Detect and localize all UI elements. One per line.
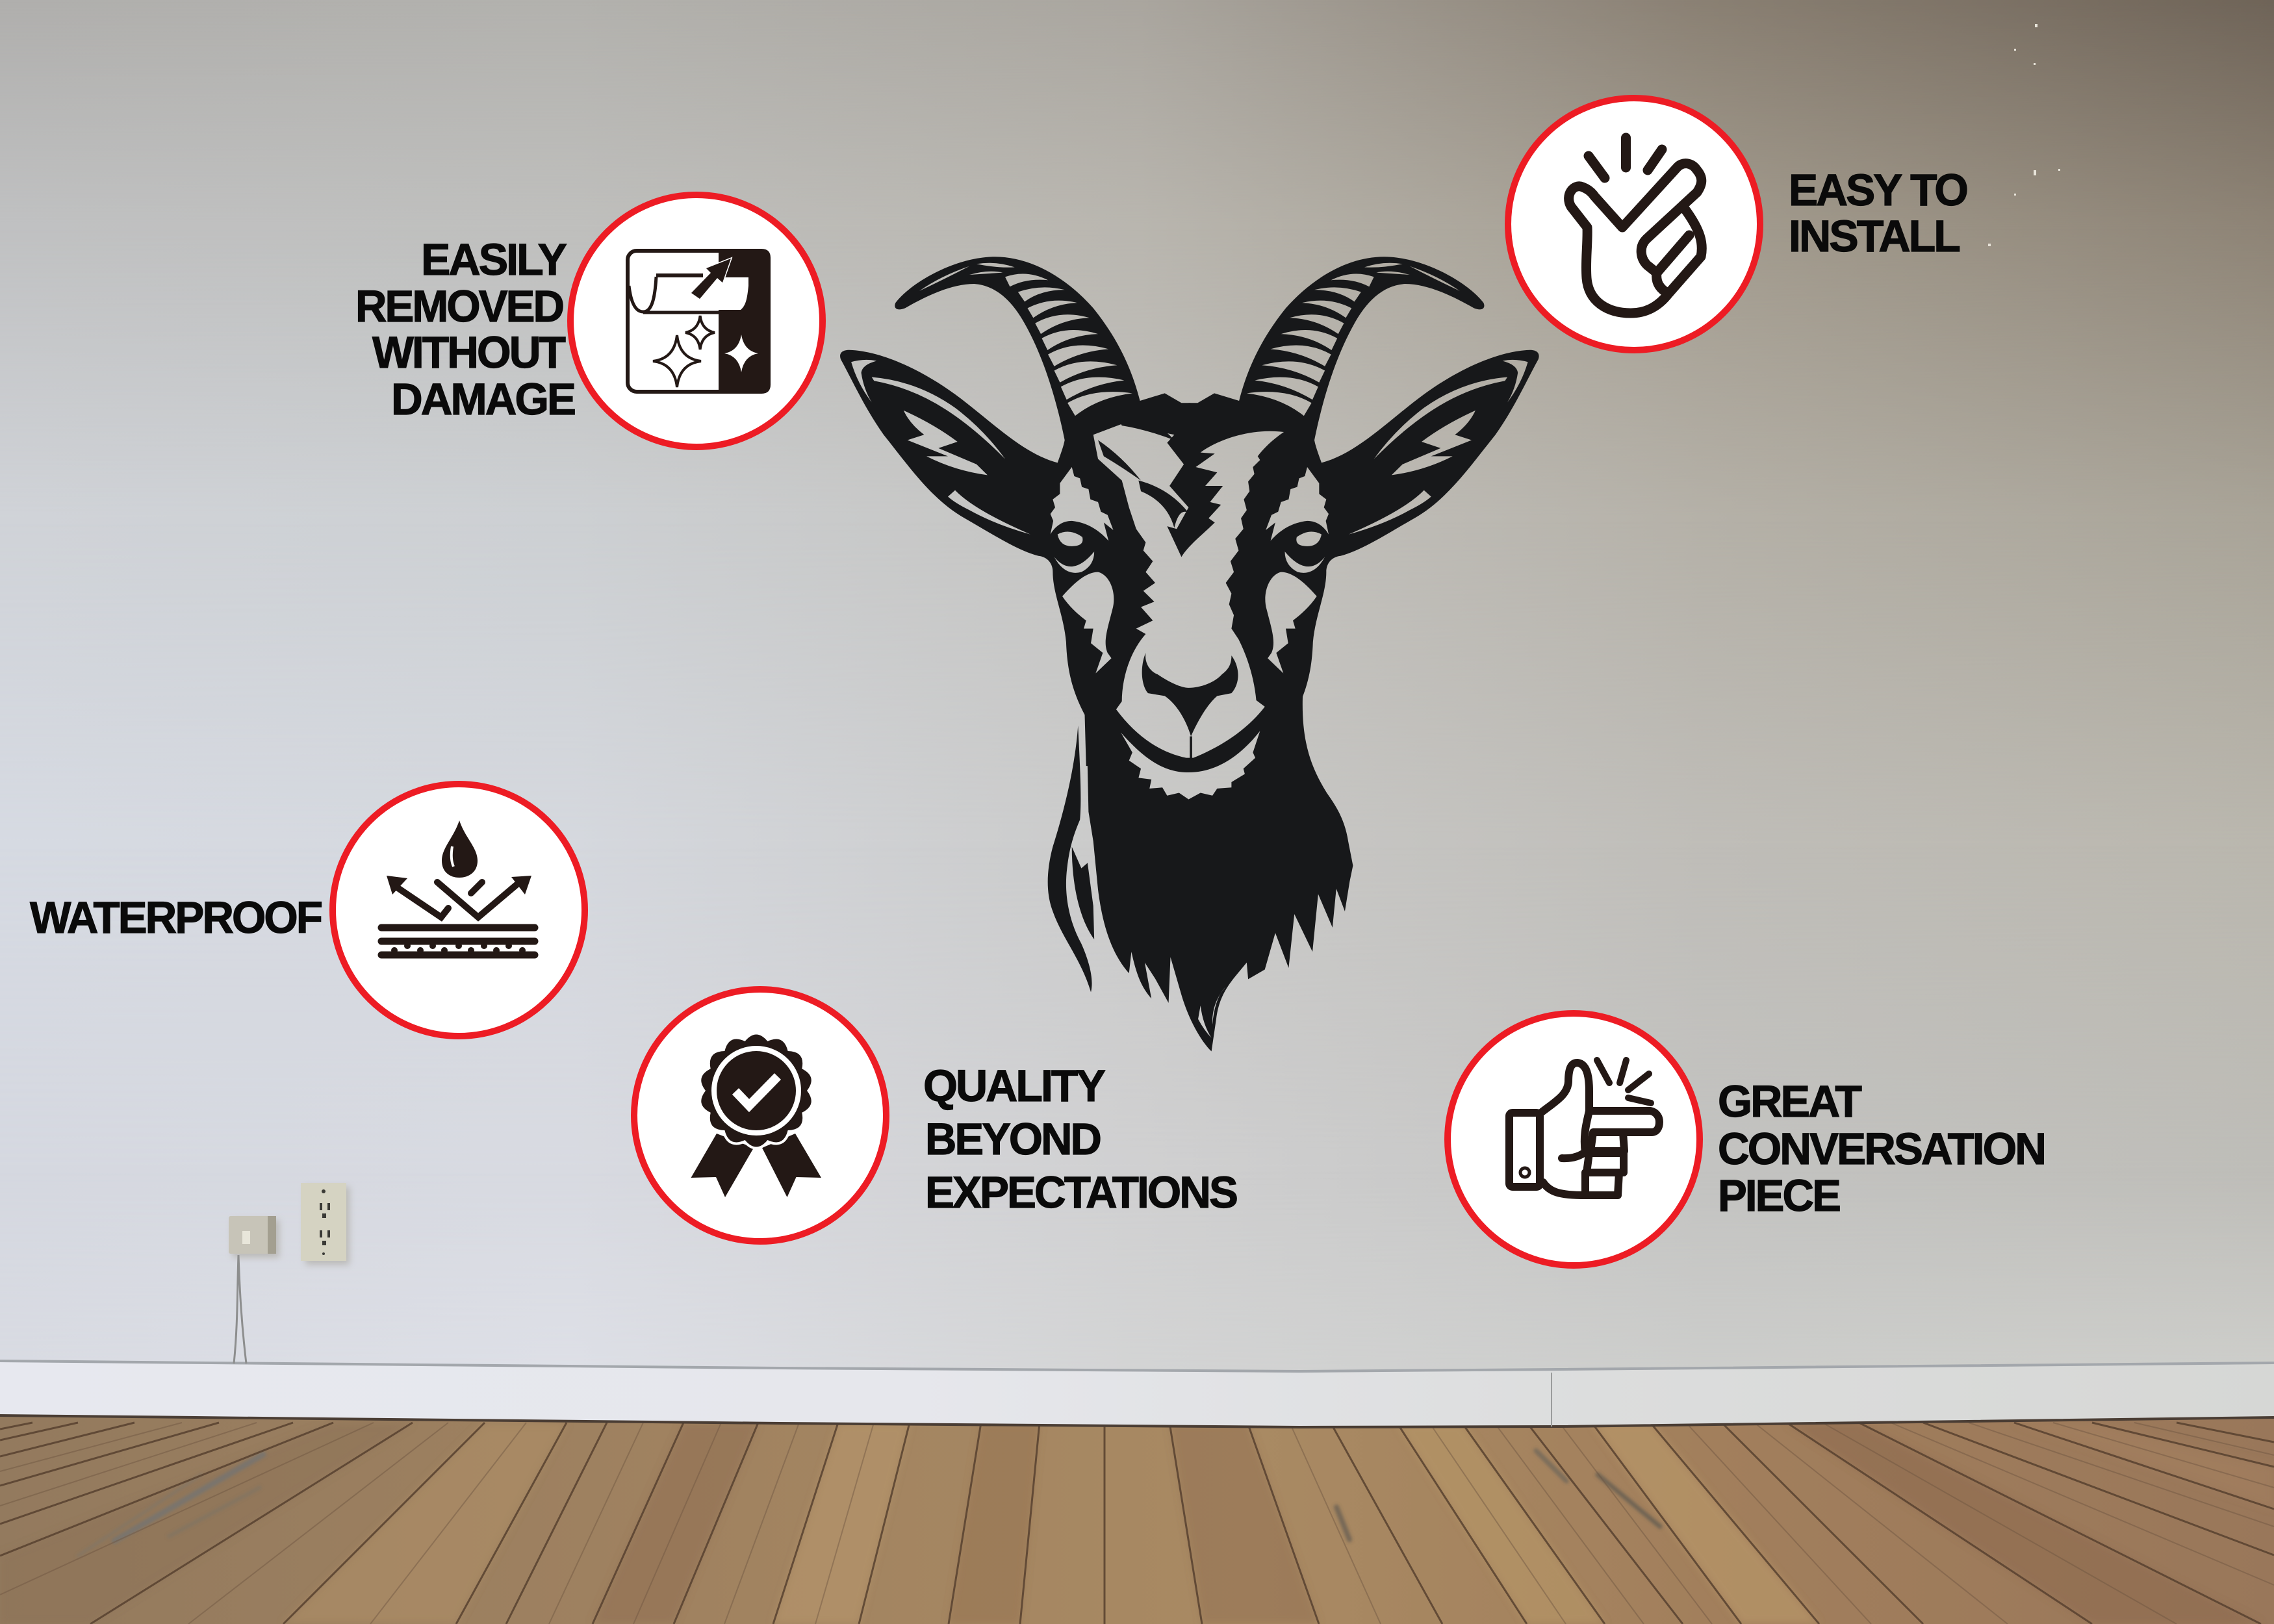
goat head decal (838, 254, 1541, 1054)
icon badge circle (570, 195, 823, 447)
icon badge circle (1448, 1013, 1700, 1265)
feature: easy to install (1508, 98, 1967, 350)
label: REMOVED (355, 281, 563, 331)
label: DAMAGE (391, 374, 575, 424)
label: PIECE (1718, 1171, 1840, 1221)
feature: waterproof (30, 784, 585, 1036)
icon badge circle (333, 784, 585, 1036)
wood floor (0, 1410, 2274, 1624)
label (355, 235, 575, 424)
icon badge circle (634, 989, 886, 1241)
label (1789, 165, 1967, 261)
label (923, 1061, 1237, 1217)
feature: easily removed without damage (355, 195, 823, 447)
label: WITHOUT (372, 327, 566, 377)
feature: quality beyond expectations (634, 989, 1237, 1241)
label: GREAT (1718, 1076, 1862, 1126)
icon: snapping hand (1509, 1060, 1659, 1195)
label: INSTALL (1789, 211, 1960, 261)
label: BEYOND (925, 1114, 1100, 1164)
icon: peel-off sticker with sparkles (628, 249, 771, 394)
feature: great conversation piece (1448, 1013, 2045, 1265)
icon badge circle (1508, 98, 1760, 350)
label: WATERPROOF (30, 893, 322, 943)
icon: water drop repelled by layers (381, 820, 535, 955)
icon: crossed fingers snap (1569, 138, 1702, 313)
label (1718, 1076, 2045, 1221)
label: QUALITY (923, 1061, 1105, 1111)
baseboard (0, 1361, 2274, 1427)
icon: rosette award with check mark (691, 1034, 821, 1197)
label: CONVERSATION (1718, 1124, 2045, 1174)
label: EXPECTATIONS (925, 1167, 1237, 1217)
label: EASILY (421, 235, 567, 285)
label: EASY TO (1789, 165, 1967, 215)
wall outlet (301, 1183, 350, 1265)
wall switch and cable (229, 1216, 279, 1364)
